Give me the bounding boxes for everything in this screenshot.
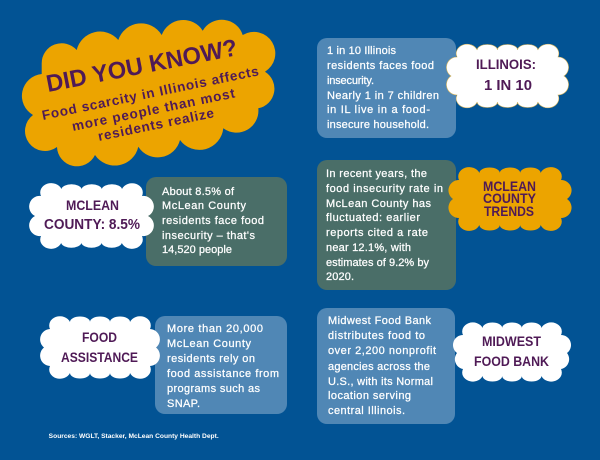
- cloud label: food assistance: [40, 316, 160, 379]
- callout: did you know: [22, 20, 275, 166]
- panel: food assistance: [40, 316, 287, 414]
- sources: Sources: WGLT, Stacker, McLean County Health Dept.: [49, 433, 219, 440]
- text box: Illinois stat: Nearly 1 in 7 children: [327, 90, 439, 102]
- text box: Illinois stat: [317, 38, 456, 138]
- text box: food assistance: residents rely on: [167, 353, 255, 365]
- text box: trends: [317, 160, 456, 290]
- cloud label: trends: TRENDS: [484, 203, 534, 219]
- text box: food assistance: SNAP.: [167, 398, 200, 410]
- text box: McLean County stat: McLean County: [162, 200, 246, 212]
- cloud label: Midwest Food Bank: [453, 322, 571, 382]
- text box: trends: fluctuated: earlier: [326, 212, 420, 224]
- cloud label: food assistance: ASSISTANCE: [61, 349, 138, 365]
- text box: Midwest Food Bank: central Illinois.: [328, 405, 405, 417]
- text box: trends: food insecurity rate in: [326, 183, 443, 195]
- cloud label: trends: COUNTY: [483, 190, 537, 206]
- cloud label: Midwest Food Bank: MIDWEST: [482, 333, 541, 349]
- text box: food assistance: [155, 316, 287, 414]
- text box: trends: reports cited a rate: [326, 227, 428, 239]
- cloud label: food assistance: FOOD: [82, 329, 117, 345]
- text box: McLean County stat: About 8.5% of: [162, 186, 235, 198]
- cloud: did you know background: [22, 20, 275, 166]
- cloud label: trends: [448, 167, 572, 231]
- cloud label: Midwest Food Bank: FOOD BANK: [474, 353, 549, 369]
- text box: food assistance: More than 20,000: [167, 323, 263, 335]
- text box: Illinois stat: residents faces food: [327, 60, 434, 72]
- cloud label: McLean County 8.5%: [29, 183, 154, 249]
- text box: Midwest Food Bank: over 2,200 nonprofit: [328, 345, 436, 357]
- text box: McLean County stat: residents face food: [162, 215, 264, 227]
- cloud label: Illinois 1 in 10: 1 IN 10: [484, 77, 532, 94]
- text box: McLean County stat: 14,520 people: [162, 244, 232, 256]
- text box: Illinois stat: insecure household.: [327, 119, 429, 131]
- panel: McLean County trends: [317, 160, 572, 290]
- text box: Midwest Food Bank: location serving: [328, 390, 411, 402]
- subtitle: more people than most: [71, 85, 237, 134]
- text box: Midwest Food Bank: distributes food to: [328, 330, 425, 342]
- text box: food assistance: McLean County: [167, 338, 252, 350]
- cloud label: Illinois 1 in 10: ILLINOIS:: [476, 56, 536, 72]
- text box: food assistance: programs such as: [167, 383, 260, 395]
- text box: Midwest Food Bank: [317, 308, 455, 424]
- text box: Midwest Food Bank: U.S., with its Normal: [328, 376, 433, 388]
- text box: Midwest Food Bank: Midwest Food Bank: [328, 315, 432, 327]
- cloud label: McLean County 8.5%: MCLEAN: [66, 197, 119, 213]
- cloud label: Illinois 1 in 10: [446, 44, 569, 108]
- text box: McLean County stat: insecurity – that's: [162, 230, 256, 242]
- panel: Illinois 1 in 10: [317, 38, 569, 138]
- text box: trends: near 12.1%, with: [326, 242, 411, 254]
- text box: trends: 2020.: [326, 271, 354, 283]
- text box: Illinois stat: 1 in 10 Illinois: [327, 45, 396, 57]
- text box: trends: In recent years, the: [326, 168, 427, 180]
- text box: Illinois stat: in IL live in a food-: [327, 104, 430, 116]
- cloud label: trends: MCLEAN: [483, 178, 536, 194]
- title: DID YOU KNOW?: [44, 34, 240, 98]
- text box: trends: estimates of 9.2% by: [326, 257, 430, 269]
- panel: Midwest Food Bank: [317, 308, 571, 424]
- text box: McLean County stat: [146, 177, 287, 266]
- panel: McLean County 8.5%: [29, 177, 287, 266]
- text box: Midwest Food Bank: agencies across the: [328, 361, 430, 373]
- cloud label: McLean County 8.5%: COUNTY: 8.5%: [44, 217, 140, 233]
- text box: trends: McLean County has: [326, 198, 432, 210]
- text box: food assistance: food assistance from: [167, 368, 279, 380]
- subtitle: Food scarcity in Illinois affects: [41, 63, 260, 123]
- text box: Illinois stat: insecurity.: [327, 75, 374, 87]
- subtitle: residents realize: [97, 105, 216, 144]
